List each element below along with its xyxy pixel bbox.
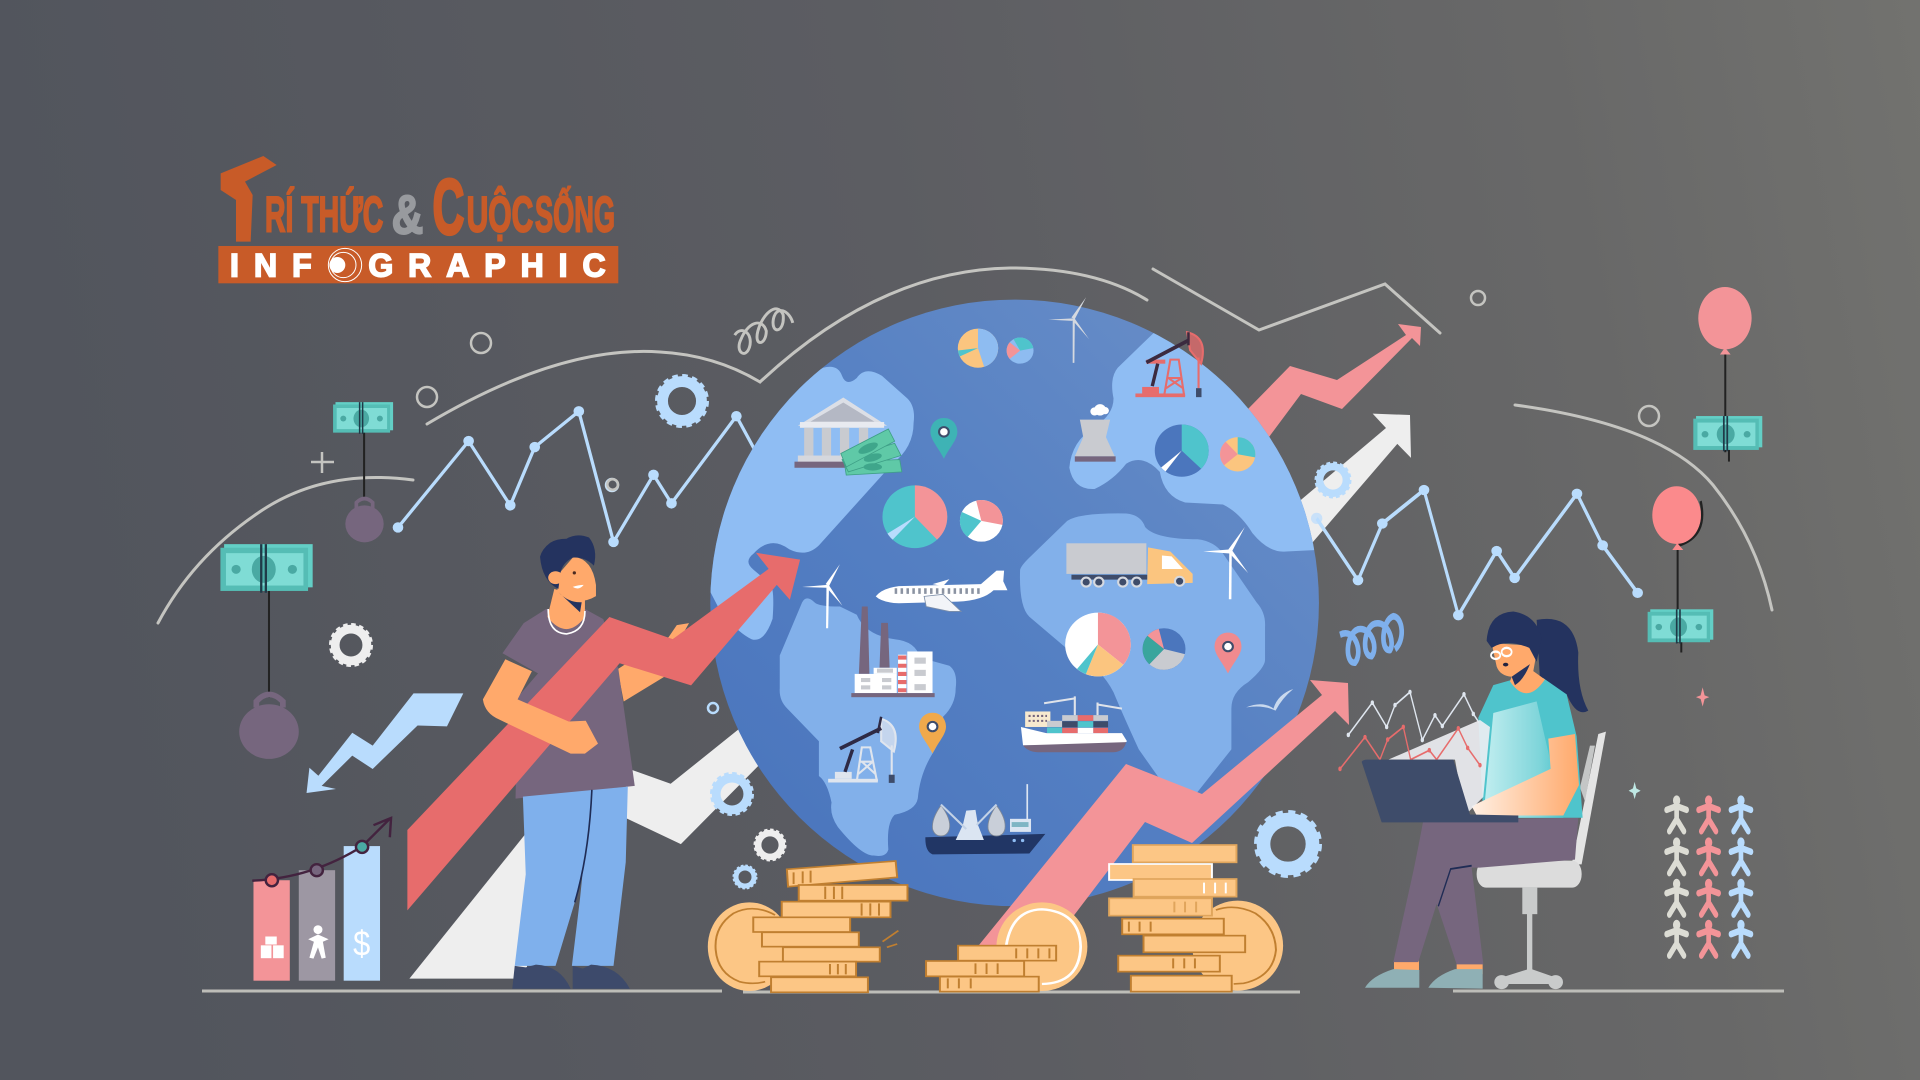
pie 7 [1065, 613, 1131, 676]
continents [697, 321, 1328, 856]
middle coin stack [926, 902, 1087, 992]
pie 2 [1007, 338, 1034, 364]
decorative small rings and plus [311, 291, 1659, 713]
right line chart [1311, 485, 1643, 620]
map pin teal [930, 418, 957, 459]
bird [1246, 689, 1293, 711]
laptop [1362, 760, 1518, 822]
bank building [794, 398, 887, 468]
fishing boat [925, 784, 1045, 854]
bar icons [261, 924, 370, 963]
logo: Tri Thuc & Cuoc Song [218, 156, 618, 284]
ground lines [202, 991, 1784, 992]
man head and neck [540, 535, 596, 634]
pie 6 [1220, 437, 1255, 471]
upper balloon [1693, 287, 1762, 462]
coin stacks [708, 845, 1283, 992]
left coin stack [708, 861, 907, 992]
globe ocean [710, 300, 1319, 906]
red arrow carried by man [407, 553, 800, 910]
logo infographic band: INF [230, 248, 312, 284]
man with arrow [407, 535, 800, 989]
woman ponytail [1537, 619, 1588, 712]
logo wordmark: UỘC [467, 186, 533, 243]
woman head [1487, 612, 1545, 693]
woman shoes [1365, 961, 1483, 989]
upper pink growth arrow [1248, 324, 1421, 437]
grey spiral [735, 309, 793, 353]
man front arm [483, 659, 598, 754]
map pin orange [919, 713, 946, 754]
bar icons: $ [353, 924, 370, 963]
oil pump red [1135, 332, 1203, 397]
money and weights left [220, 402, 393, 759]
trend line [252, 818, 391, 886]
truck [1066, 543, 1193, 587]
man trousers [515, 787, 628, 966]
lower balloon [1648, 486, 1713, 652]
pie 3 [882, 485, 947, 548]
woman trousers [1393, 818, 1578, 964]
oil pump pale [828, 717, 896, 783]
logo wordmark: & [392, 183, 423, 245]
background curves [158, 268, 1772, 623]
light blue down arrow [307, 693, 463, 793]
laptop screen projection [1388, 720, 1490, 815]
small red line chart [1338, 725, 1482, 771]
large weight [220, 544, 313, 759]
bars [253, 880, 290, 981]
logo wordmark: C [433, 162, 464, 250]
large pink growth arrow [979, 680, 1349, 960]
balloons with money [1629, 287, 1762, 956]
cargo ship [1021, 696, 1127, 752]
woman with laptop [1338, 612, 1606, 989]
logo wordmark: RÍ THỨC [265, 186, 383, 243]
man back arm [618, 623, 689, 701]
logo infographic band [218, 246, 618, 284]
pie 4 [960, 500, 1003, 542]
globe [697, 297, 1328, 906]
left line chart [393, 406, 760, 547]
woman arm [1472, 734, 1579, 815]
man shoes [512, 965, 630, 989]
logo T mark [221, 156, 277, 242]
white growth arrow behind figures, left part [409, 729, 758, 979]
map pin pink [1215, 633, 1241, 674]
sparkles [1629, 687, 1709, 799]
small white line chart [1347, 690, 1485, 742]
blue spiral [1340, 616, 1402, 663]
chair [1477, 732, 1606, 989]
pie 1 [958, 329, 998, 368]
pie charts [882, 329, 1255, 676]
airplane [876, 571, 1007, 611]
cooling tower [1075, 404, 1116, 462]
pie 5 [1155, 425, 1209, 477]
man shirt [502, 609, 635, 799]
logo wordmark [265, 162, 615, 250]
banknotes on globe [841, 429, 902, 475]
right coin stack [1109, 845, 1283, 992]
logo infographic band: GRAPHIC [368, 248, 606, 284]
people pictogram grid [1667, 795, 1751, 956]
logo wordmark: SỐNG [535, 186, 615, 243]
small weight [333, 402, 393, 542]
left mini bar chart [252, 818, 391, 981]
woman shirt [1478, 678, 1583, 818]
pie 8 [1143, 628, 1186, 670]
gears [331, 377, 1350, 888]
factory [851, 607, 935, 697]
wind turbines [802, 297, 1248, 628]
white growth arrow, upper right part [1297, 414, 1411, 548]
